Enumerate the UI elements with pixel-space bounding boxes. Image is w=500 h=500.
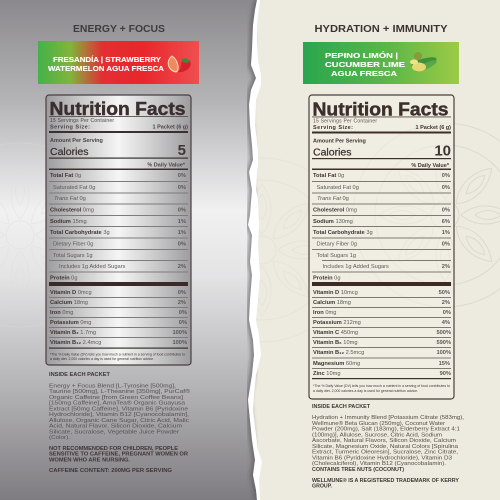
nutrient rows: Total Sugars 1g — [53, 253, 93, 259]
nutrient rows: Vitamin B₆ 10mg — [313, 340, 358, 346]
nutrient rows: 100% — [172, 340, 187, 346]
nutrient rows: Includes 1g Added Sugars — [59, 264, 126, 270]
ingredient list: Wellmune® Beta Glucan (250mg), Coconut Water — [312, 420, 445, 427]
nutrient rows: 1% — [178, 219, 186, 225]
mandala pattern: energy side — [0, 143, 112, 327]
footnote — [50, 352, 185, 361]
warning: NOT RECOMMENDED FOR CHILDREN, PEOPLE — [49, 446, 178, 452]
footnote: *The % Daily Value (DV) tells you how much a nutrient in a serving of food contributes to — [50, 352, 185, 356]
servings — [312, 116, 451, 134]
warning: SENSITIVE TO CAFFEINE, PREGNANT WOMEN OR — [49, 452, 188, 458]
panel title: Nutrition Facts — [312, 100, 448, 120]
ingredient list: Vitamin B6 (Pyridoxine Hydrochloride), Vitamin D3 — [312, 455, 452, 461]
ingredient list: Powder (200mg), Salt (183mg), Elderberry Extract 4:1 — [312, 426, 460, 432]
nutrient rows: Trans Fat 0g — [54, 196, 86, 202]
footnote — [313, 384, 450, 393]
nutrient rows: 0% — [178, 185, 186, 191]
inside each packet heading: INSIDE EACH PACKET — [312, 404, 371, 410]
nutrient rows: 0% — [178, 208, 186, 214]
ingredient list: Energy + Focus Blend [L-Tyrosine [500mg], — [49, 383, 176, 389]
nutrient rows: Sodium 130mg — [313, 219, 353, 225]
caffeine content: CAFFEINE CONTENT: 200MG PER SERVING — [49, 468, 172, 474]
nutrition facts panel: hydration — [309, 95, 454, 399]
heading: hydration + immunity: HYDRATION + IMMUNITY — [314, 24, 448, 35]
nutrient rows: 0% — [442, 208, 450, 214]
nutrient rows: 0% — [179, 320, 187, 326]
nutrient rows: Vitamin D 0mcg — [50, 290, 92, 296]
trademark note: GROUP. — [312, 484, 332, 490]
nutrient rows: 4% — [442, 320, 450, 326]
inside each packet heading: INSIDE EACH PACKET — [49, 372, 111, 378]
nutrient rows: Vitamin C 450mg — [313, 330, 358, 336]
nutrient rows — [312, 173, 451, 379]
nutrient rows: 0% — [178, 242, 186, 248]
nutrient rows: Vitamin B₁₂ 2.5mcg — [313, 350, 364, 356]
nutrient rows: Calcium 18mg — [313, 300, 351, 306]
ingredient list — [49, 383, 191, 441]
nutrient rows: 6% — [442, 219, 450, 225]
nutrient rows: Zinc 10mg — [313, 371, 341, 377]
banner: strawberry watermelon — [38, 41, 199, 84]
nutrient rows: Iron 0mg — [313, 310, 336, 316]
calories: Calories — [50, 146, 89, 158]
trademark note — [312, 477, 459, 490]
trademark note: WELLMUNE® IS A REGISTERED TRADEMARK OF KERRY — [312, 477, 459, 484]
footnote: a daily diet. 2,000 calories a day is used for general nutrition advice. — [50, 357, 154, 361]
nutrient rows: 0% — [442, 242, 450, 248]
ingredient list: Organic Caffeine [from Green Coffee Beans] — [49, 395, 183, 401]
nutrient rows: 0% — [442, 185, 450, 191]
nutrient rows: 0% — [443, 310, 451, 316]
torn paper edge — [248, 0, 262, 500]
nutrient rows: Total Fat 0g — [50, 173, 81, 179]
nutrient rows: Vitamin D 10mcg — [313, 290, 358, 296]
banner text — [48, 55, 164, 73]
nutrient rows: Magnesium 60mg — [313, 361, 360, 367]
torn edge shadow — [248, 0, 257, 500]
nutrition facts panel: energy — [46, 95, 191, 365]
nutrient rows: 0% — [178, 173, 186, 179]
calories: Amount Per Serving — [313, 138, 366, 144]
banner text: FRESANDÍA | STRAWBERRY — [53, 55, 161, 64]
ingredient list: Extract, Turmeric Oleoresin], Sucralose, Zinc Citrate, — [312, 450, 458, 456]
servings: 1 Packet (6 g) — [153, 124, 188, 130]
banner text: PEPINO LIMÓN | — [325, 51, 398, 60]
nutrient rows: Total Carbohydrate 3g — [313, 230, 373, 236]
background: hydration side — [250, 0, 500, 500]
icon: cucumber and lime — [410, 52, 438, 74]
nutrient rows: 2% — [442, 300, 450, 306]
servings: 15 Servings Per Container — [313, 118, 377, 124]
nutrient rows: 15% — [439, 361, 450, 367]
nutrient rows: 2% — [178, 300, 186, 306]
banner text: WATERMELON AGUA FRESCA — [48, 66, 164, 73]
nutrient rows: 90% — [440, 371, 451, 377]
ingredient list: Allulose, Organic Cane Sugar, Citric Acid, Malic — [49, 418, 189, 424]
servings: Serving Size: — [313, 125, 353, 131]
ingredient list: CONTAINS TREE NUTS (COCONUT) — [312, 467, 404, 473]
nutrient rows: Vitamin B₁₂ 2.4mcg — [50, 340, 101, 346]
nutrient rows: 1% — [178, 230, 186, 236]
ingredient list: Silicate, Magnesium Oxide, Natural Colors [Spirulina — [312, 444, 459, 450]
nutrient rows: Total Fat 0g — [313, 173, 344, 179]
nutrient rows: 1% — [442, 230, 450, 236]
banner text: CUCUMBER LIME — [325, 60, 405, 69]
banner text — [325, 51, 405, 78]
footnote: *The % Daily Value (DV) tells you how much a nutrient in a serving of food contributes to — [313, 384, 450, 388]
nutrient rows: 100% — [436, 350, 451, 356]
nutrient rows: Calcium 18mg — [50, 300, 88, 306]
ingredient list: Hydration + Immunity Blend [Potassium Citrate (583mg), — [312, 415, 464, 421]
panel title: Nutrition Facts — [50, 99, 186, 119]
ingredient list: Ascorbate, Natural Flavors, Silicon Dioxide, Calcium — [312, 438, 456, 444]
nutrient rows: Total Carbohydrate 3g — [50, 230, 110, 236]
heading: energy + focus: ENERGY + FOCUS — [73, 24, 165, 35]
nutrient rows: Total Sugars 1g — [316, 253, 356, 259]
ingredient list: Extract [50mg Caffeine], Vitamin B6 [Pyridoxine — [49, 406, 188, 412]
nutrient rows: 50% — [439, 290, 450, 296]
servings: Serving Size: — [50, 124, 90, 130]
ingredient list: Acid, Natural Flavor, Silicon Dioxide, Calcium — [49, 424, 182, 430]
nutrient rows: 2% — [442, 264, 450, 270]
nutrient rows: Dietary Fiber 0g — [53, 242, 93, 248]
nutrient rows: 500% — [436, 330, 451, 336]
banner text: AGUA FRESCA — [331, 69, 398, 78]
calories: 10 — [434, 142, 451, 160]
servings: 15 Servings Per Container — [50, 118, 114, 124]
warning: WOMEN WHO ARE NURSING. — [49, 458, 130, 464]
ingredient list — [312, 415, 464, 473]
nutrient rows: Cholesterol 0mg — [313, 208, 357, 214]
nutrient rows: Dietary Fiber 0g — [316, 242, 357, 248]
nutrient rows: Protein 0g — [313, 276, 341, 282]
banner: cucumber lime — [303, 42, 459, 84]
nutrient rows: Trans Fat 0g — [317, 196, 349, 202]
calories: Amount Per Serving — [50, 138, 103, 144]
ingredient list: Hydrochloride], Vitamin B12 [Cyanocobalamin], — [49, 412, 189, 418]
nutrient rows: 0% — [178, 290, 186, 296]
ingredient list: (Cholecalciferol), Vitamin B12 (Cyanocobalamin). — [312, 461, 446, 467]
calories: % Daily Value* — [147, 162, 186, 168]
servings: 1 Packet (6 g) — [416, 125, 451, 131]
icon: watermelon and strawberry — [168, 56, 191, 72]
nutrient rows: Vitamin B₂ 1.7mg — [50, 330, 96, 336]
nutrient rows: 100% — [172, 330, 187, 336]
nutrient rows: Includes 1g Added Sugars — [322, 264, 389, 270]
nutrient rows: Saturated Fat 0g — [53, 185, 95, 191]
nutrient rows: 2% — [178, 264, 186, 270]
ingredient list: Taurine [500mg], L-Theanine [350mg], PurCaf® — [49, 388, 191, 395]
nutrient rows: Protein 0g — [50, 276, 78, 282]
ingredients: energy — [49, 372, 191, 474]
nutrient rows: 0% — [179, 310, 187, 316]
mandala pattern: hydration side lower left — [170, 158, 354, 342]
footnote: a daily diet. 2,000 calories a day is used for general nutrition advice. — [313, 389, 418, 393]
mandala pattern: hydration side — [353, 123, 500, 307]
nutrient rows: Potassium 0mg — [50, 320, 91, 326]
ingredient list: [150mg Caffeine], AmaTea® Organic Guayusa — [49, 400, 186, 406]
nutrient rows — [49, 173, 188, 349]
nutrient rows: Sodium 15mg — [50, 219, 87, 225]
nutrient rows: 590% — [436, 340, 451, 346]
background: energy side — [0, 0, 257, 500]
calories — [49, 138, 188, 170]
nutrient rows: Cholesterol 0mg — [50, 208, 94, 214]
nutrient rows: Saturated Fat 0g — [316, 185, 359, 191]
warning — [49, 446, 188, 464]
ingredients: hydration — [312, 404, 464, 490]
calories: 5 — [178, 142, 186, 159]
calories: Calories — [313, 146, 352, 158]
nutrient rows: Iron 0mg — [50, 310, 73, 316]
ingredient list: Silicate, Sucralose, Vegetable Juice Powder — [49, 429, 179, 435]
servings — [49, 116, 188, 133]
nutrient rows: 0% — [442, 173, 450, 179]
ingredient list: (Color). — [49, 435, 70, 441]
nutrient rows: Potassium 212mg — [313, 320, 361, 326]
ingredient list: (100mg)], Allulose, Sucrose, Citric Acid, Sodium — [312, 432, 442, 438]
calories: % Daily Value* — [411, 163, 450, 169]
calories — [312, 138, 451, 170]
